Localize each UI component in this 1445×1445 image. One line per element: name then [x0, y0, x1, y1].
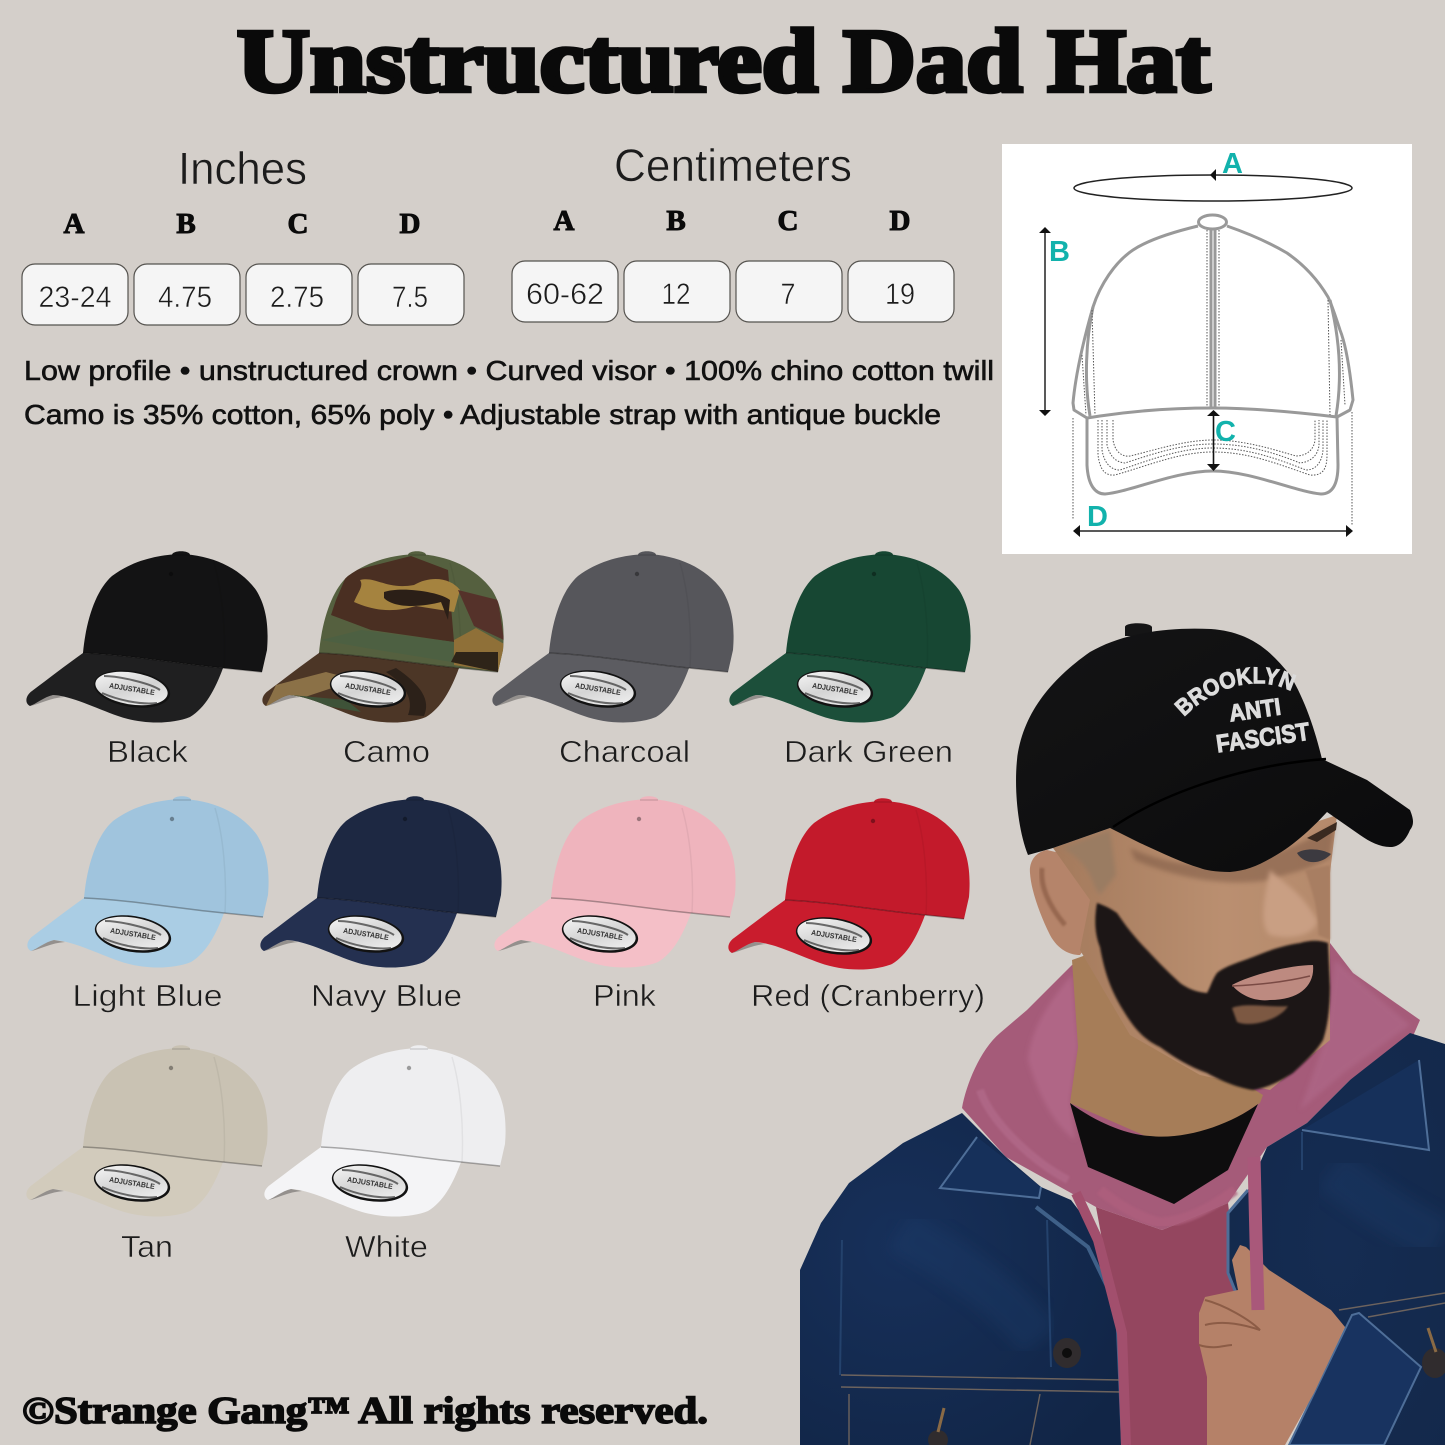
- hat: White: [264, 1045, 506, 1217]
- heading: inches: Inches: [178, 143, 307, 194]
- label: White: White: [345, 1229, 428, 1264]
- label: Red (Cranberry): Red (Cranberry): [751, 978, 985, 1013]
- footer copyright: ©Strange Gang™ All rights reserved.: [22, 1390, 708, 1432]
- label: Light Blue: Light Blue: [72, 978, 222, 1013]
- panel: centimeters measurements: [512, 140, 954, 322]
- stitching: [1073, 230, 1352, 525]
- hat: Charcoal: ADJUSTABLE: [575, 681, 621, 697]
- column letters: A: [64, 208, 85, 240]
- black baseball cap: [1016, 623, 1413, 872]
- hat: Pink: [494, 796, 736, 968]
- hat: Black: [26, 551, 268, 723]
- values: [38, 281, 428, 314]
- label: Pink: Pink: [593, 978, 657, 1013]
- hoodie front: [1096, 1203, 1240, 1445]
- column letters: A: [554, 205, 575, 237]
- photo: man wearing black hat: [800, 623, 1445, 1445]
- hat: Red (Cranberry): ADJUSTABLE: [811, 928, 857, 944]
- hood highlights: [1028, 975, 1078, 1140]
- column letters: [554, 205, 910, 237]
- values: 4.75: [158, 281, 212, 314]
- label: Charcoal: Charcoal: [559, 734, 690, 769]
- hat: Charcoal: [492, 551, 734, 723]
- beard: [1095, 903, 1330, 1090]
- description text: Camo is 35% cotton, 65% poly • Adjustable strap with antique buckle: [24, 399, 941, 430]
- hat: Camo: [262, 551, 506, 723]
- description text: Low profile • unstructured crown • Curved visor • 100% chino cotton twill: [24, 355, 994, 386]
- measure B: crown height: B: [1049, 236, 1070, 268]
- measure A: circumference: [1074, 148, 1352, 201]
- hat: Pink: ADJUSTABLE: [577, 926, 623, 942]
- values: 7.5: [392, 281, 428, 314]
- chin patch: [1232, 1005, 1288, 1024]
- measure D: visor width: D: [1087, 501, 1108, 533]
- values: 60-62: [526, 278, 604, 311]
- denim shading and seams: [840, 1060, 1445, 1445]
- value boxes: [22, 264, 464, 325]
- label: Camo: Camo: [343, 734, 430, 769]
- panel: inches measurements: [22, 143, 464, 325]
- eye: [1297, 849, 1331, 862]
- hat embroidery: ANTI: [1227, 694, 1283, 728]
- jacket left side: [800, 1113, 1129, 1445]
- hat: Black: ADJUSTABLE: [109, 681, 155, 697]
- measure B: crown height: [1039, 227, 1070, 416]
- hat: Light Blue: [27, 796, 269, 968]
- hat: Dark Green: ADJUSTABLE: [812, 681, 858, 697]
- label: Dark Green: Dark Green: [784, 734, 953, 769]
- hat: Tan: ADJUSTABLE: [109, 1175, 155, 1191]
- values: [526, 278, 915, 311]
- hat: Light Blue: ADJUSTABLE: [110, 926, 156, 942]
- values: 2.75: [270, 281, 324, 314]
- lips: [1232, 965, 1313, 1000]
- hat: Navy Blue: ADJUSTABLE: [343, 926, 389, 942]
- hood: [962, 943, 1420, 1230]
- hat: White: ADJUSTABLE: [347, 1175, 393, 1191]
- hat: Camo: ADJUSTABLE: [345, 681, 391, 697]
- values: 12: [662, 278, 690, 311]
- far cheek: [1305, 865, 1330, 940]
- hat: Tan: [26, 1045, 268, 1217]
- label: Tan: Tan: [121, 1229, 173, 1264]
- description text: [24, 355, 994, 430]
- panel: measurement diagram: [1002, 144, 1412, 554]
- values: 7: [780, 278, 796, 311]
- faded hair: [1062, 830, 1116, 895]
- hat: Navy Blue: [260, 796, 502, 968]
- jacket right side: [1228, 1033, 1445, 1445]
- hat outline: [1073, 215, 1353, 494]
- black tee: [1070, 1103, 1258, 1204]
- label: Black: Black: [107, 734, 189, 769]
- values: 19: [885, 278, 915, 311]
- face: [1053, 815, 1337, 1090]
- column letters: C: [288, 208, 308, 240]
- heading: centimeters: Centimeters: [614, 140, 852, 191]
- nose highlight: [1263, 870, 1317, 937]
- column letters: D: [400, 208, 420, 240]
- jacket buttons: [928, 1328, 1445, 1445]
- measure D: visor width: [1073, 501, 1353, 537]
- measure C: visor depth: C: [1215, 416, 1236, 448]
- label: Navy Blue: Navy Blue: [311, 978, 462, 1013]
- left drawstring: [1076, 1193, 1126, 1445]
- hat embroidery: FASCIST: [1214, 718, 1311, 758]
- column letters: D: [890, 205, 910, 237]
- measure A: circumference: A: [1222, 148, 1243, 180]
- column letters: B: [176, 208, 196, 240]
- title: Unstructured Dad Hat: [237, 12, 1210, 111]
- hat: Dark Green: [729, 551, 971, 723]
- values: 23-24: [38, 281, 112, 314]
- right drawstring: [1254, 1157, 1258, 1310]
- hat embroidery: BROOKLYN: [1174, 666, 1296, 716]
- hat: Red (Cranberry): [728, 798, 970, 970]
- column letters: [64, 208, 420, 240]
- under-brim shadow: [1130, 825, 1335, 882]
- hand: [1199, 1245, 1345, 1445]
- eyebrow: [1307, 822, 1337, 842]
- neck: [1070, 950, 1263, 1138]
- hat embroidery: [1174, 666, 1311, 758]
- column letters: B: [666, 205, 686, 237]
- value boxes: [512, 261, 954, 322]
- cuff: [1289, 1313, 1421, 1445]
- ear: [1030, 850, 1093, 955]
- column letters: C: [778, 205, 798, 237]
- measure C: visor depth: [1207, 410, 1236, 471]
